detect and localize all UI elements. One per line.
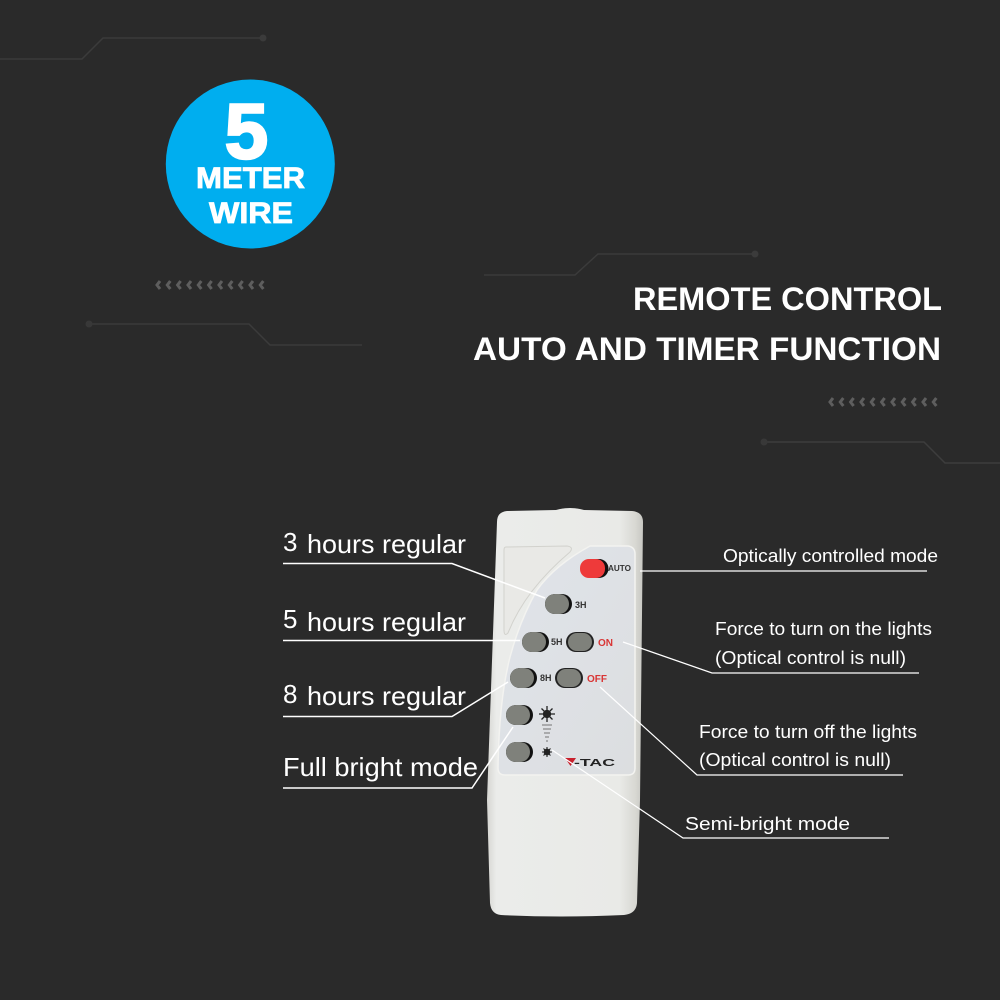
circuit line: top left <box>0 34 266 59</box>
button: semi bright <box>506 742 533 762</box>
circuit line: left middle <box>86 320 362 345</box>
button: 8H <box>510 668 552 688</box>
circuit line: right upper <box>484 250 758 275</box>
callout: 5 hours regular <box>283 604 520 640</box>
badge: 5 meter wire: WIRE <box>209 197 293 230</box>
button: 5H: 5H <box>551 637 563 647</box>
badge: 5 meter wire <box>166 80 335 248</box>
callout: force lights off: (Optical control is null) <box>699 750 891 770</box>
logo: V-TAC: -TAC <box>574 757 616 769</box>
control face panel <box>498 546 635 775</box>
chevron row: right <box>830 398 936 406</box>
callout: 3 hours regular: 3 <box>283 527 297 557</box>
badge: 5 meter wire: METER <box>196 162 305 195</box>
callout: force lights on <box>623 619 932 673</box>
callout: 8 hours regular: 8 <box>283 679 297 709</box>
button: ON <box>566 632 613 652</box>
circuit line: right lower <box>760 438 1000 463</box>
callout: force lights off: Force to turn off the lights <box>699 722 917 742</box>
remote control device <box>487 508 643 916</box>
callout: semi-bright mode <box>552 750 889 838</box>
chevron row: left <box>157 281 263 289</box>
button: 8H: 8H <box>540 673 552 683</box>
heading: remote control: REMOTE CONTROL <box>633 281 942 317</box>
icon: large sun <box>539 706 555 722</box>
callout: force lights on: Force to turn on the lights <box>715 619 932 639</box>
upper left recess <box>504 546 571 634</box>
button: full bright <box>506 705 533 725</box>
icon: brightness scale <box>542 725 552 741</box>
button: 3H: 3H <box>575 600 587 610</box>
button: OFF <box>555 668 607 688</box>
callout: force lights on: (Optical control is null) <box>715 648 906 668</box>
button: OFF: OFF <box>587 674 607 685</box>
callout: force lights off <box>600 687 917 775</box>
heading: auto and timer function: AUTO AND TIMER FUNCTION <box>473 331 941 367</box>
callout: full bright mode <box>283 727 513 788</box>
button: auto <box>580 559 631 578</box>
logo: V-TAC <box>565 757 616 769</box>
callout: full bright mode: Full bright mode <box>283 752 478 782</box>
button: auto: AUTO <box>608 563 631 573</box>
callout: 5 hours regular: hours regular <box>307 607 466 637</box>
callout: 8 hours regular <box>283 679 508 716</box>
callout: optically controlled mode: Optically controlled mode <box>723 546 938 566</box>
button: 5H <box>522 632 563 652</box>
callout: 3 hours regular: hours regular <box>307 529 466 559</box>
callout: 8 hours regular: hours regular <box>307 681 466 711</box>
badge: 5 meter wire: 5 <box>225 87 268 175</box>
button: 3H <box>545 594 587 614</box>
button: ON: ON <box>598 638 613 649</box>
callout: 3 hours regular <box>283 527 545 598</box>
callout: semi-bright mode: Semi-bright mode <box>685 814 850 834</box>
callout: 5 hours regular: 5 <box>283 604 297 634</box>
remote body <box>487 508 643 916</box>
icon: small sun <box>542 747 552 757</box>
